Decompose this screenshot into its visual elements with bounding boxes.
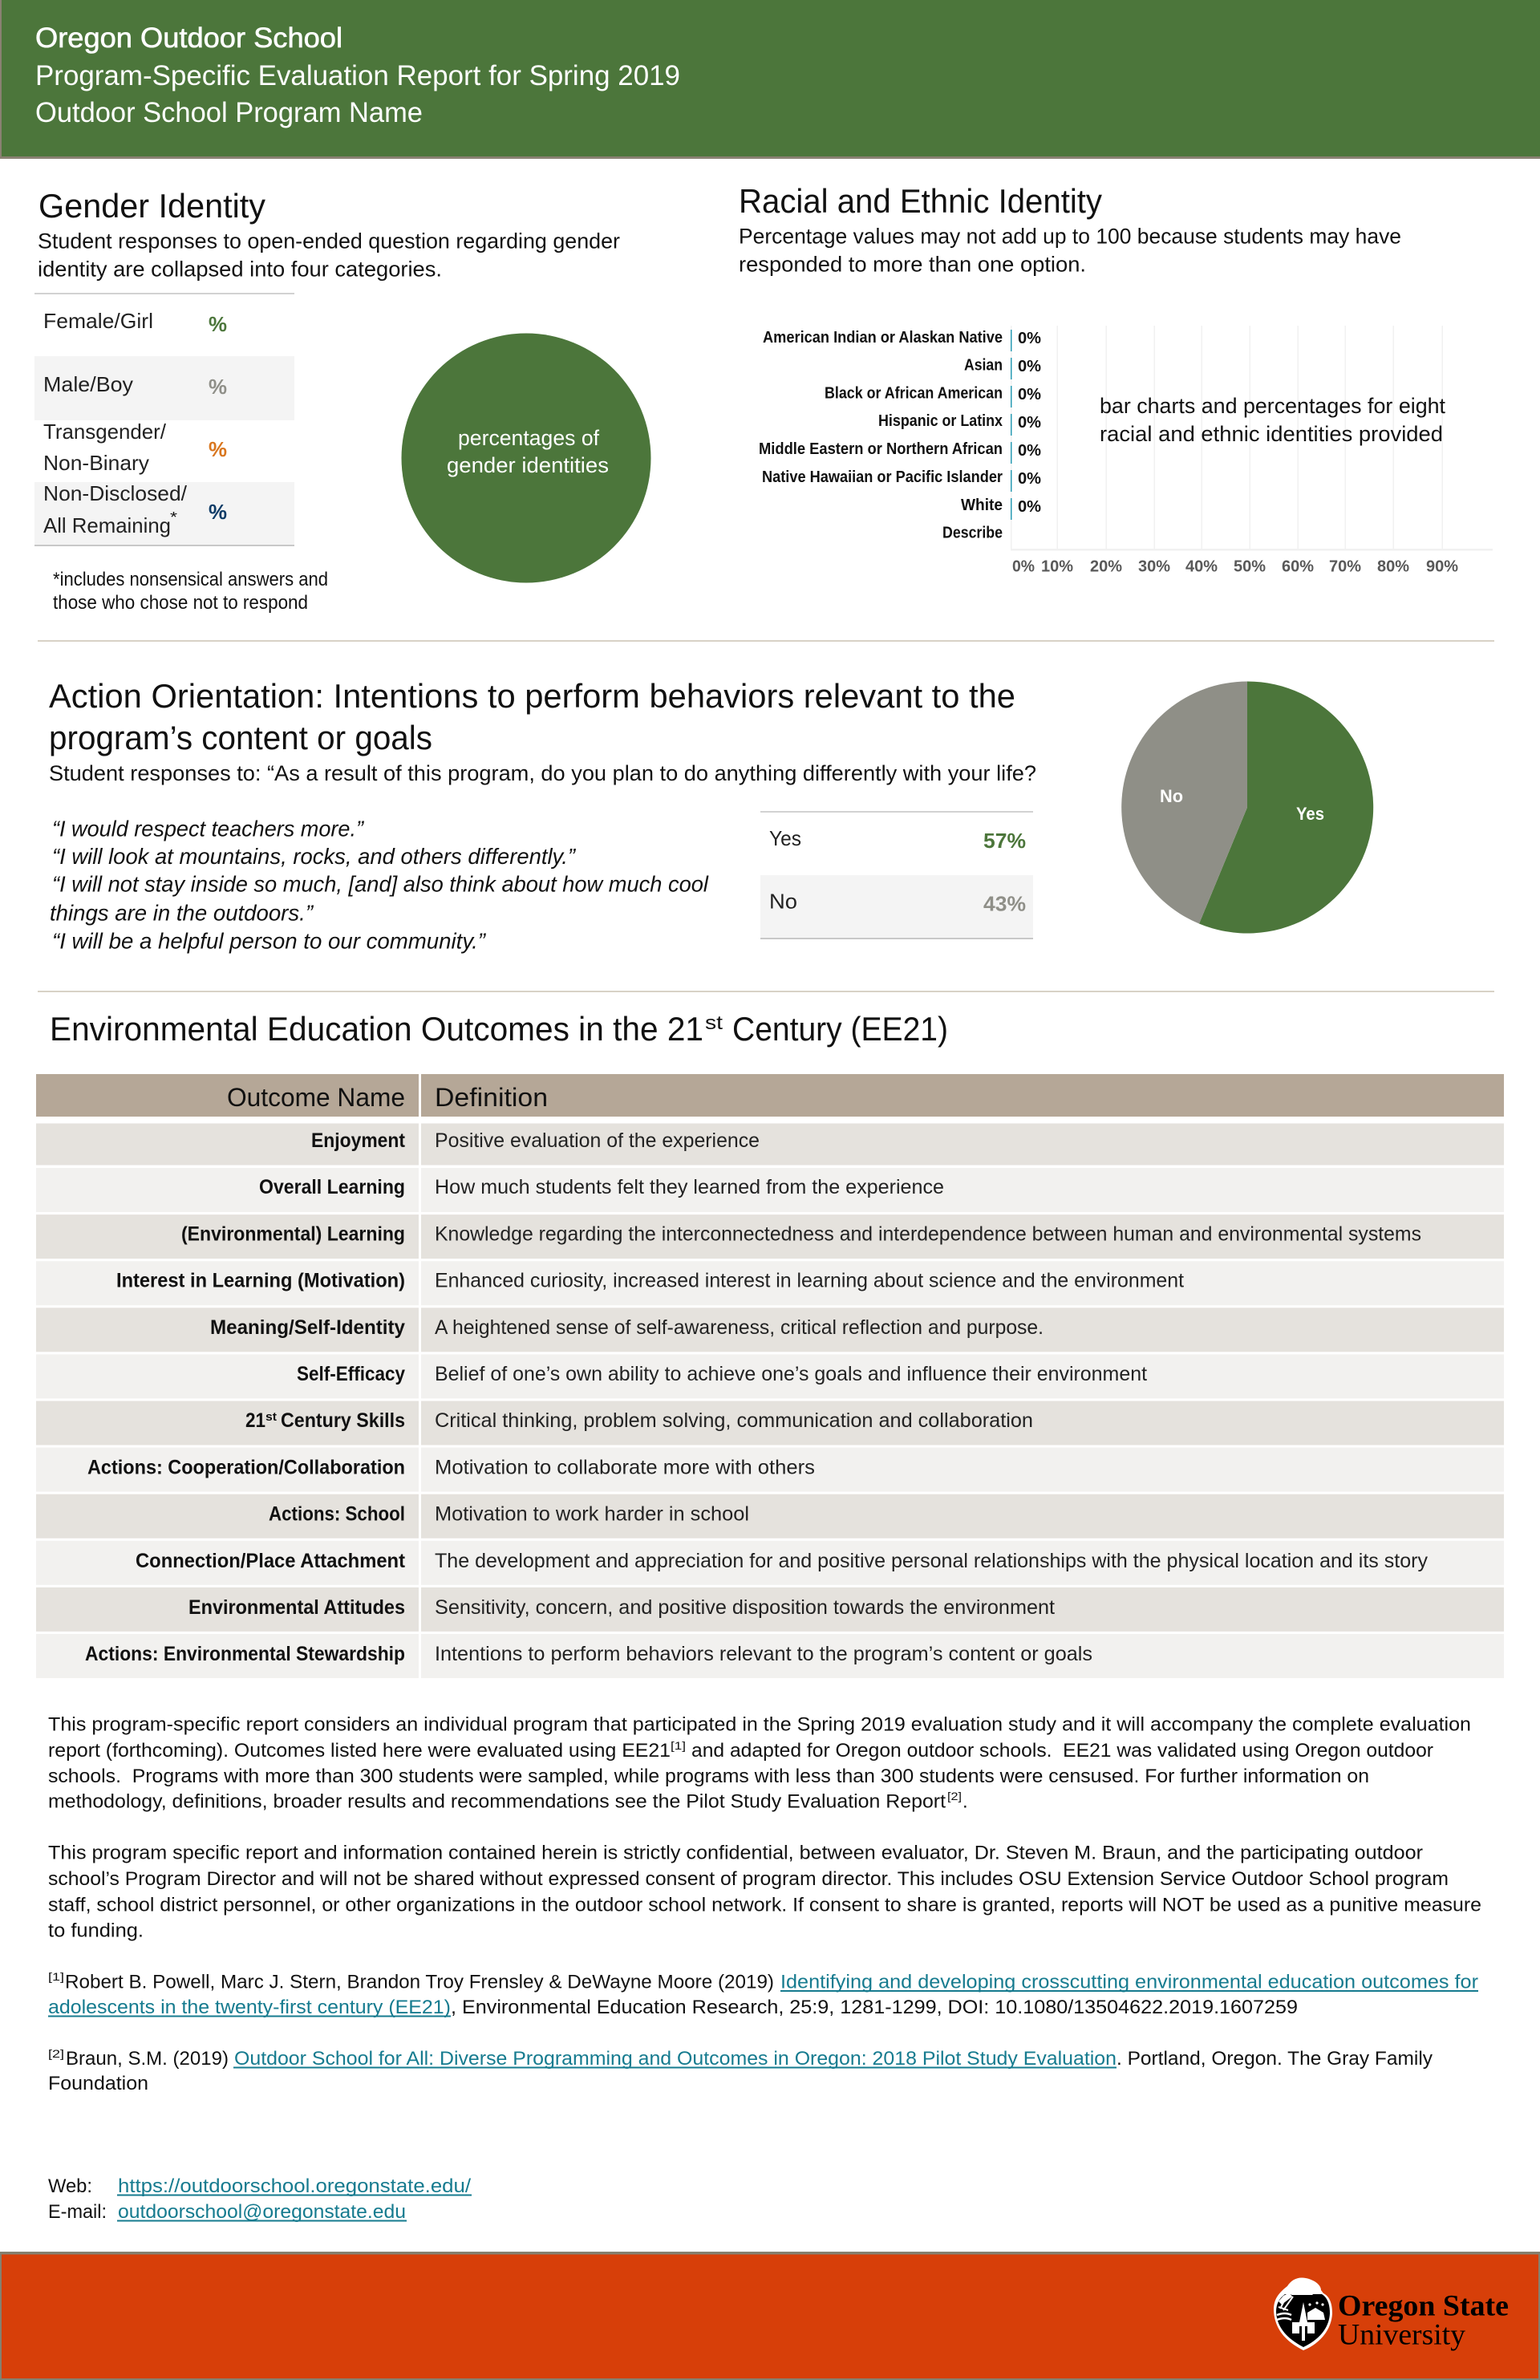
heading: EE21 outcomes: Environmental Education Outcomes in the 21	[50, 1010, 703, 1048]
student quotes: “I will be a helpful person to our community.”	[52, 929, 487, 953]
contact information: Web:	[48, 2175, 92, 2197]
row: 21st century skills: Critical thinking, problem solving, communication and collaboration	[435, 1409, 1033, 1432]
contact information: outdoorschool@oregonstate.edu	[118, 2201, 406, 2223]
pie chart: yes/no: Yes	[1296, 804, 1324, 824]
gender table: *	[170, 509, 177, 525]
racial description text: Percentage values may not add up to 100 because students may have	[739, 225, 1401, 249]
row: meaning: A heightened sense of self-awareness, critical reflection and purpose.	[435, 1316, 1044, 1339]
bar chart: racial and ethnic identity: 0%	[1018, 358, 1041, 375]
student quotes: “I would respect teachers more.”	[52, 817, 365, 841]
footer banner	[0, 2252, 1540, 2380]
bar chart: racial and ethnic identity	[759, 326, 1493, 576]
row: environmental stewardship: Actions: Environmental Stewardship	[85, 1643, 405, 1665]
reference 1: [1]	[48, 1970, 64, 1983]
row: overall learning: Overall Learning	[259, 1176, 405, 1198]
row: self-efficacy: Belief of one’s own ability to achieve one’s goals and influence their environment	[435, 1363, 1147, 1385]
row: 21st century skills: st	[265, 1410, 277, 1424]
yes/no table: No	[769, 889, 797, 913]
heading: action orientation: Action Orientation: Intentions to perform behaviors relevant to the	[49, 677, 1015, 715]
row: meaning: Meaning/Self-Identity	[210, 1316, 405, 1339]
text block: confidentiality statement	[48, 1842, 1481, 1941]
heading: gender identity: Gender Identity	[38, 187, 265, 225]
chart note: racial and ethnic identities provided	[1100, 422, 1443, 446]
row: interest in learning	[116, 1270, 1184, 1292]
contact information: https://outdoorschool.oregonstate.edu/	[118, 2175, 471, 2197]
icon: Oregon State University shield	[1274, 2277, 1332, 2350]
table header row: Outcome Name	[227, 1083, 405, 1112]
gender table: %	[209, 312, 227, 336]
bar chart: racial and ethnic identity: White	[961, 497, 1003, 514]
row: cooperation	[87, 1456, 815, 1478]
bar chart: racial and ethnic identity: 0%	[1018, 470, 1041, 488]
gender circle chart: percentages of	[458, 426, 599, 450]
row: environmental stewardship: Intentions to perform behaviors relevant to the program’s content or goals	[435, 1643, 1092, 1665]
row: place attachment: Connection/Place Attachment	[136, 1550, 406, 1572]
panel: EE21 outcomes	[36, 1010, 1504, 1679]
gender table: Non-Disclosed/	[43, 481, 188, 505]
bar chart: racial and ethnic identity: Middle Eastern or Northern African	[759, 440, 1003, 458]
bar chart: racial and ethnic identity: 60%	[1282, 558, 1314, 576]
bar chart: racial and ethnic identity: 0%	[1018, 330, 1041, 347]
bar chart: racial and ethnic identity: 80%	[1377, 558, 1409, 576]
text block: program report description: This program-specific report considers an individual program that participated in the Spring 2019 evaluation study and it will accompany the complete evaluation	[48, 1713, 1471, 1736]
text block: program report description: [1]	[671, 1739, 686, 1752]
header title lines: Outdoor School Program Name	[35, 97, 423, 128]
reference 2: Braun, S.M. (2019)	[66, 2048, 229, 2070]
reference 2: . Portland, Oregon. The Gray Family	[1116, 2048, 1433, 2070]
text block: confidentiality statement: school’s Program Director and will not be shared without expressed consent of program director. This includes OSU Extension Service Outdoor School program	[48, 1868, 1449, 1890]
pie chart: yes/no	[1121, 681, 1373, 933]
outcomes table	[36, 1074, 1504, 1679]
row: environmental attitudes: Environmental Attitudes	[188, 1596, 405, 1619]
row: school: Motivation to work harder in school	[435, 1503, 749, 1526]
bar chart: racial and ethnic identity: Asian	[964, 356, 1003, 374]
text block: program report description: report (forthcoming). Outcomes listed here were evaluated using EE21	[48, 1740, 671, 1762]
Oregon State University wordmark	[1338, 2289, 1509, 2352]
student quotes	[50, 817, 709, 953]
text block: program report description: schools. Programs with more than 300 students were sampled, while programs with less than 300 students were censused. For further information on	[48, 1766, 1369, 1787]
row: cooperation: Motivation to collaborate more with others	[435, 1456, 815, 1478]
table header row: Definition	[435, 1083, 548, 1112]
gender table: Transgender/	[43, 420, 167, 444]
heading: racial and ethnic identity: Racial and Ethnic Identity	[739, 182, 1102, 220]
bar chart: racial and ethnic identity: Native Hawaiian or Pacific Islander	[762, 468, 1003, 486]
text block: program report description: [2]	[947, 1790, 962, 1802]
yes/no table	[760, 811, 1033, 939]
bar chart: racial and ethnic identity: 0%	[1018, 414, 1041, 432]
gender table: %	[209, 437, 227, 461]
text block: confidentiality statement: staff, school district personnel, or other organizations in the outdoor school network. If consent to share is granted, reports will NOT be used as a punitive measure	[48, 1895, 1481, 1916]
gender footnote: *includes nonsensical answers and	[53, 569, 328, 590]
header title lines: Program-Specific Evaluation Report for Spring 2019	[35, 60, 680, 91]
row: interest in learning: Enhanced curiosity, increased interest in learning about science and the environment	[435, 1270, 1184, 1292]
bar chart: racial and ethnic identity: 0%	[1012, 558, 1035, 576]
text block: confidentiality statement: This program specific report and information contained herein is strictly confidential, between evaluator, Dr. Steven M. Braun, and the participating outdoor	[48, 1842, 1423, 1864]
bar chart: racial and ethnic identity: 70%	[1329, 558, 1361, 576]
contact information: E-mail:	[48, 2201, 107, 2223]
row: environmental learning: Knowledge regarding the interconnectedness and interdependence between human and environmental systems	[435, 1222, 1421, 1245]
header banner	[0, 0, 1540, 159]
gender table: %	[209, 500, 227, 524]
reference 1	[48, 1970, 1478, 2018]
row: environmental learning: (Environmental) Learning	[181, 1222, 405, 1245]
reference 1: Identifying and developing crosscutting environmental education outcomes for	[780, 1972, 1478, 1993]
row: 21st century skills: Century Skills	[281, 1409, 405, 1432]
pie chart: yes/no: No	[1160, 786, 1183, 806]
chart note	[1100, 394, 1445, 446]
bar chart: racial and ethnic identity: 0%	[1018, 386, 1041, 403]
text block: program report description: methodology, definitions, broader results and recommendations see the Pilot Study Evaluation Report	[48, 1790, 946, 1813]
Oregon State University wordmark: University	[1338, 2318, 1466, 2352]
yes/no table: 57%	[983, 829, 1026, 853]
gender description text	[38, 229, 620, 281]
row: self-efficacy: Self-Efficacy	[297, 1363, 405, 1385]
header title lines	[35, 22, 680, 128]
gender table: Male/Boy	[43, 372, 133, 396]
student quotes: things are in the outdoors.”	[50, 900, 314, 926]
bar chart: racial and ethnic identity: Hispanic or Latinx	[878, 412, 1003, 430]
panel: racial and ethnic identity	[739, 182, 1493, 576]
table row backgrounds	[36, 1123, 1504, 1679]
gender table: All Remaining	[43, 513, 171, 537]
bar chart: racial and ethnic identity: 90%	[1426, 558, 1458, 576]
row: school: Actions: School	[269, 1503, 405, 1526]
yes/no table: Yes	[769, 826, 801, 850]
row: overall learning: How much students felt they learned from the experience	[435, 1176, 944, 1198]
gender circle chart: gender identities	[447, 453, 609, 477]
text block: program report description	[48, 1713, 1471, 1813]
row: enjoyment: Enjoyment	[311, 1129, 406, 1152]
racial description text	[739, 225, 1401, 276]
reference 1: adolescents in the twenty-first century (EE21)	[48, 1997, 451, 2018]
header title lines: Oregon Outdoor School	[35, 22, 342, 54]
gender table: %	[209, 375, 227, 399]
student quotes: “I will not stay inside so much, [and] also think about how much cool	[52, 871, 709, 897]
text block: confidentiality statement: to funding.	[48, 1920, 144, 1941]
row: environmental stewardship	[85, 1643, 1092, 1665]
row: place attachment: The development and appreciation for and positive personal relationships with the physical location and its story	[435, 1550, 1428, 1572]
text block: program report description: and adapted for Oregon outdoor schools. EE21 was validated using Oregon outdoor	[691, 1740, 1433, 1762]
bar chart: racial and ethnic identity: 30%	[1138, 558, 1170, 576]
row: environmental attitudes: Sensitivity, concern, and positive disposition towards the environment	[435, 1596, 1055, 1619]
panel: gender identity	[34, 187, 651, 614]
bar chart: racial and ethnic identity: Describe	[942, 525, 1003, 542]
student quotes: “I will look at mountains, rocks, and others differently.”	[52, 844, 577, 869]
yes/no table: 43%	[983, 892, 1026, 916]
gender table: Female/Girl	[43, 309, 153, 333]
row: interest in learning: Interest in Learning (Motivation)	[116, 1270, 405, 1292]
survey question text: Student responses to: “As a result of this program, do you plan to do anything differently with your life?	[49, 761, 1036, 785]
gender description text: Student responses to open-ended question regarding gender	[38, 229, 620, 253]
gender table: Non-Binary	[43, 451, 149, 475]
bar chart: racial and ethnic identity: American Indian or Alaskan Native	[763, 329, 1003, 347]
gender footnote	[53, 569, 328, 614]
bar chart: racial and ethnic identity: 0%	[1018, 498, 1041, 516]
gender description text: identity are collapsed into four categories.	[38, 257, 442, 281]
bar chart: racial and ethnic identity: Black or African American	[825, 385, 1003, 403]
Oregon State University wordmark: Oregon State	[1338, 2289, 1509, 2323]
panel: action orientation	[49, 677, 1373, 953]
reference 1: Robert B. Powell, Marc J. Stern, Brandon Troy Frensley & DeWayne Moore (2019)	[65, 1972, 774, 1993]
heading: action orientation: program’s content or goals	[49, 719, 432, 756]
heading: EE21 outcomes: Century (EE21)	[732, 1010, 948, 1048]
contact information	[48, 2175, 472, 2223]
bar chart: racial and ethnic identity: 40%	[1185, 558, 1218, 576]
reference 2: Foundation	[48, 2073, 148, 2094]
gender footnote: those who chose not to respond	[53, 592, 308, 614]
heading: action orientation	[49, 677, 1015, 756]
heading: EE21 outcomes: st	[705, 1012, 723, 1034]
reference 2: Outdoor School for All: Diverse Programming and Outcomes in Oregon: 2018 Pilot Study Evaluation	[234, 2048, 1116, 2070]
bar chart: racial and ethnic identity: 0%	[1018, 442, 1041, 460]
bar chart: racial and ethnic identity: 10%	[1041, 558, 1073, 576]
gender table	[34, 293, 294, 546]
racial description text: responded to more than one option.	[739, 252, 1086, 276]
gender circle chart	[401, 334, 651, 582]
bar chart: racial and ethnic identity: 50%	[1234, 558, 1266, 576]
reference 1: , Environmental Education Research, 25:9, 1281-1299, DOI: 10.1080/13504622.2019.1607259	[451, 1997, 1298, 2018]
reference 2: [2]	[48, 2047, 64, 2060]
table header row	[36, 1074, 1504, 1117]
row: school	[269, 1503, 749, 1526]
row: enjoyment: Positive evaluation of the experience	[435, 1129, 760, 1152]
bar chart: racial and ethnic identity: 20%	[1090, 558, 1122, 576]
row: 21st century skills: 21	[245, 1409, 265, 1432]
reference 2	[48, 2047, 1433, 2094]
chart note: bar charts and percentages for eight	[1100, 394, 1445, 418]
text block: program report description: .	[962, 1790, 968, 1813]
row: cooperation: Actions: Cooperation/Collaboration	[87, 1456, 405, 1478]
